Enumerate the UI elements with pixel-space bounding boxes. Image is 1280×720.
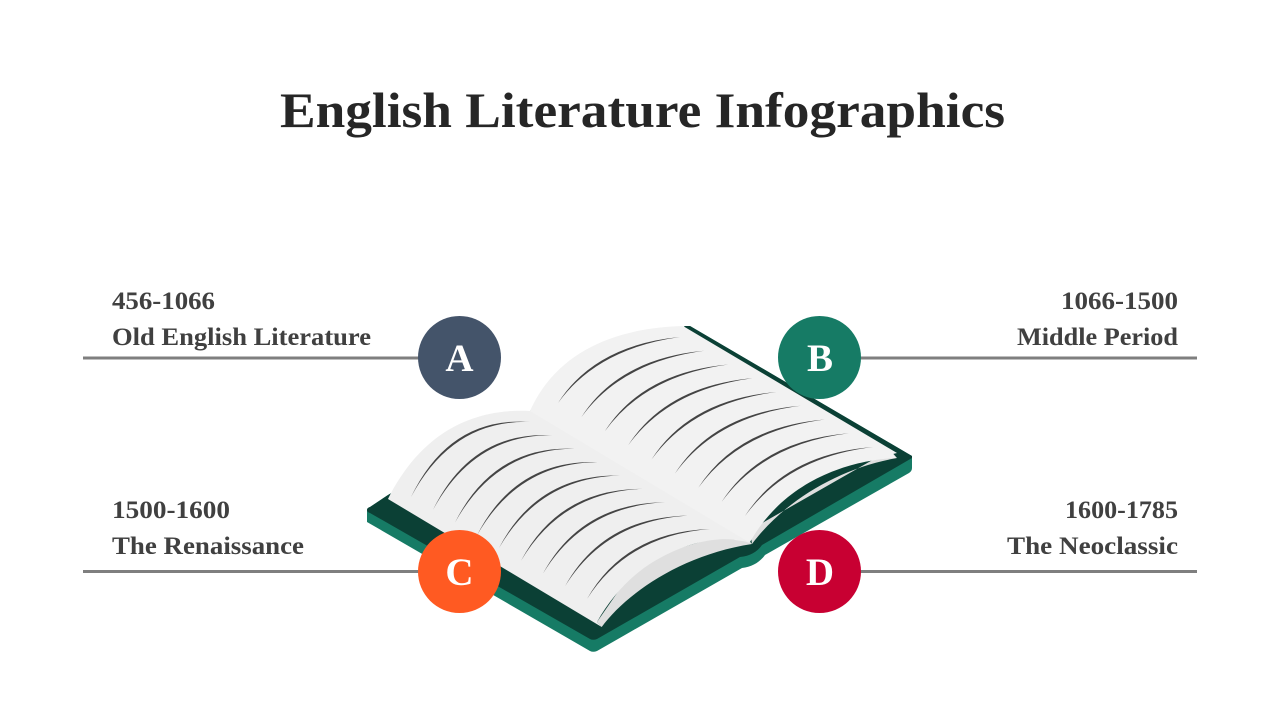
page underside shading: left [597,530,752,627]
book cover outer [367,326,912,652]
item C: The Renaissance: C [445,551,474,594]
title: English Literature Infographics [280,82,1005,138]
item B: Middle Period: B [807,337,833,380]
item A: Old English Literature: 456-1066 [112,288,215,315]
item A: Old English Literature: Old English Literature [112,324,371,351]
right page [530,326,897,542]
item D: The Neoclassic: The Neoclassic [1007,533,1178,560]
item C: The Renaissance [112,497,501,613]
item B: Middle Period: Middle Period [1017,324,1178,351]
item C: The Renaissance: 1500-1600 [112,497,230,524]
item D: The Neoclassic: D [806,551,834,594]
item D: The Neoclassic: 1600-1785 [1065,497,1178,524]
item D: The Neoclassic [778,497,1178,613]
right page text lines [558,337,873,516]
left page text lines [411,422,710,599]
book cover inner [367,326,912,640]
page underside shading: right [750,450,897,544]
item B: Middle Period [778,288,1178,399]
item A: Old English Literature: A [445,337,474,380]
item A: Old English Literature [112,288,501,399]
icon: open book [367,326,912,652]
connector lines [83,358,1197,572]
item C: The Renaissance: The Renaissance [112,533,304,560]
item B: Middle Period: 1066-1500 [1061,288,1178,315]
left page [388,411,752,627]
